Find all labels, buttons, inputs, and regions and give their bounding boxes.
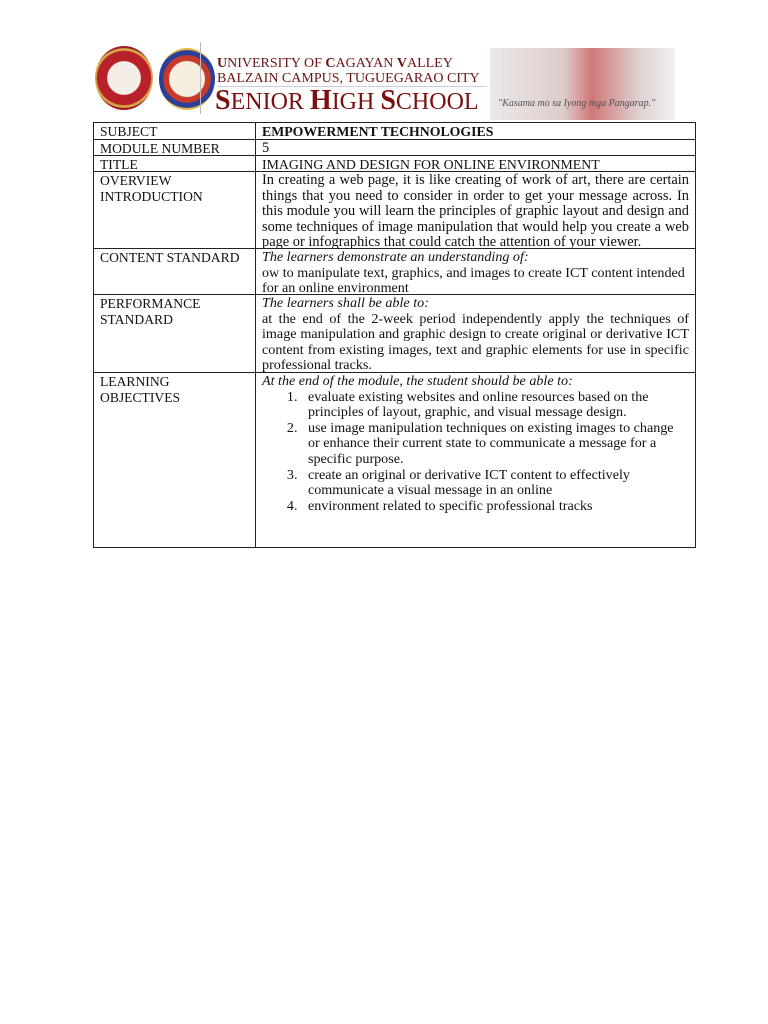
row: title: TITLE xyxy=(100,157,138,172)
campus photo with motto xyxy=(490,48,675,120)
row: performance standard xyxy=(93,294,256,373)
table: module info: The learners demonstrate an understanding of: xyxy=(262,249,529,265)
row: learning objectives: LEARNING xyxy=(100,374,169,389)
table: module info: In creating a web page, it is like creating of work of art, there are certain things that you need to consider in order to get your message across. In this module you will learn the principles of graphic layout and design and some techniques of image manipulation that would help you create a web page or infographics that could catch the attention of your viewer. xyxy=(262,172,689,249)
row: subject: SUBJECT xyxy=(100,124,157,139)
table: module info: use image manipulation techniques on existing images to change or enhance their current state to communicate a message for a specific purpose. xyxy=(308,420,674,467)
row: performance standard: STANDARD xyxy=(100,312,173,327)
row: module number xyxy=(93,139,256,156)
senior high school heading: SENIOR HIGH SCHOOL xyxy=(215,85,479,116)
logo: university seal xyxy=(95,46,153,110)
table: module info: IMAGING AND DESIGN FOR ONLINE ENVIRONMENT xyxy=(262,157,600,172)
table: module info: EMPOWERMENT TECHNOLOGIES xyxy=(262,124,493,139)
row: learning objectives xyxy=(93,372,256,548)
row: overview: INTRODUCTION xyxy=(100,189,203,204)
table: module info: At the end of the module, the student should be able to: xyxy=(262,373,573,389)
university name xyxy=(217,56,480,86)
row: content standard: CONTENT STANDARD xyxy=(100,250,240,265)
campus photo with motto: "Kasama mo sa Iyong mga Pangarap." xyxy=(498,98,655,109)
row: content standard xyxy=(93,248,256,295)
row: overview: OVERVIEW xyxy=(100,173,171,188)
row: learning objectives: OBJECTIVES xyxy=(100,390,180,405)
row: subject xyxy=(93,122,256,140)
row: overview xyxy=(93,171,256,249)
row: performance standard: PERFORMANCE xyxy=(100,296,200,311)
table: module info: environment related to specific professional tracks xyxy=(308,498,593,514)
header xyxy=(95,42,675,120)
table: module info: The learners shall be able to: xyxy=(262,295,429,311)
table: module info: evaluate existing websites and online resources based on the principles of layout, graphic, and visual message design. xyxy=(308,389,648,420)
row: module number: MODULE NUMBER xyxy=(100,141,220,156)
university name: UNIVERSITY OF CAGAYAN VALLEY xyxy=(217,56,453,71)
table: module info xyxy=(93,122,696,548)
table: module info: create an original or derivative ICT content to effectively communicate a visual message in an online xyxy=(308,467,630,498)
table: module info: at the end of the 2-week period independently apply the techniques of image manipulation and graphic design to create original or derivative ICT content from existing images, text and graphic elements for use in specific professional tracks. xyxy=(262,311,689,373)
row: title xyxy=(93,155,256,172)
logo: school seal xyxy=(159,48,215,110)
university name: BALZAIN CAMPUS, TUGUEGARAO CITY xyxy=(217,71,480,86)
table: module info: 5 xyxy=(262,140,269,156)
